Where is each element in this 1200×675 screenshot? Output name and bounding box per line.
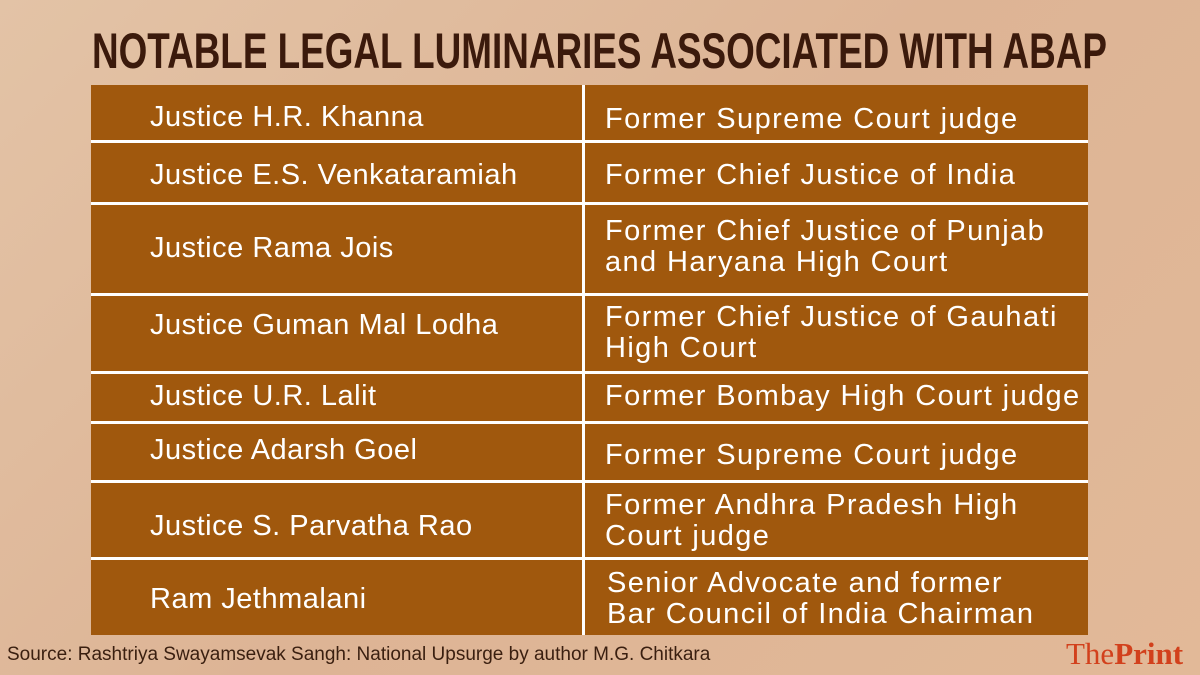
table: Justice S. Parvatha Rao: [150, 510, 473, 542]
table: Court judge: [605, 520, 770, 552]
table: Justice Rama Jois: [150, 232, 394, 264]
table: High Court: [605, 332, 758, 364]
table: Former Chief Justice of India: [605, 159, 1016, 191]
table: Justice H.R. Khanna: [150, 101, 424, 133]
table: Former Chief Justice of Gauhati: [605, 301, 1058, 333]
table: Former Supreme Court judge: [605, 103, 1019, 135]
table: [91, 85, 1088, 635]
table: Former Chief Justice of Punjab: [605, 215, 1045, 247]
row 3: [150, 215, 1045, 278]
row 2: [150, 159, 1016, 191]
table: Bar Council of India Chairman: [607, 598, 1034, 630]
row 7: [150, 489, 1019, 552]
row 1: [150, 101, 1019, 135]
source: Source: Rashtriya Swayamsevak Sangh: National Upsurge by author M.G. Chitkara: [7, 644, 710, 665]
table: Former Andhra Pradesh High: [605, 489, 1019, 521]
table: Former Supreme Court judge: [605, 439, 1019, 471]
table: Justice E.S. Venkataramiah: [150, 159, 518, 191]
row 6: [150, 434, 1019, 471]
table: Ram Jethmalani: [150, 583, 367, 615]
row 5: [150, 380, 1081, 412]
table: Former Bombay High Court judge: [605, 380, 1081, 412]
table: Justice Guman Mal Lodha: [150, 309, 498, 341]
logo: ThePrint: [1066, 636, 1183, 671]
table: and Haryana High Court: [605, 246, 949, 278]
table: Justice Adarsh Goel: [150, 434, 417, 466]
row 4: [150, 301, 1058, 364]
row 8: [150, 567, 1034, 630]
table: Senior Advocate and former: [607, 567, 1003, 599]
table: Justice U.R. Lalit: [150, 380, 377, 412]
